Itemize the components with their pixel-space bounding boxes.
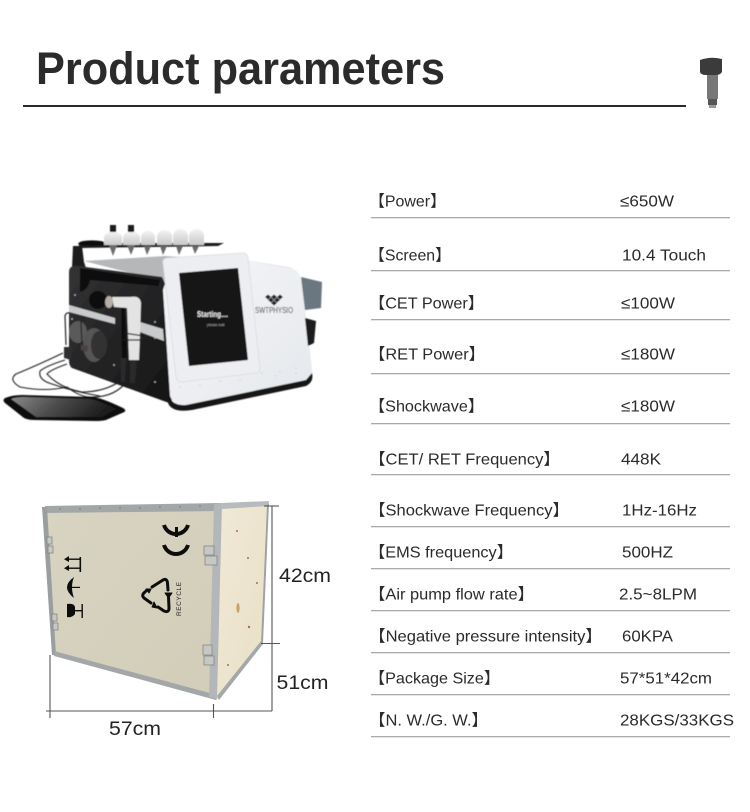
electrode heads [104,225,204,256]
connectors [64,347,72,360]
gauges [69,321,87,343]
row: CET power: ≤100W [621,296,676,312]
row: air pump [369,586,730,611]
machine illustration [4,225,322,421]
dimension lines [46,506,280,718]
grey bands [69,305,115,324]
recycle triangle [143,579,172,612]
handpiece [105,296,144,383]
row: frequency: 【CET/ RET Frequency】 [369,452,560,468]
recycle text: RECYCLE [176,581,183,616]
title underline [23,105,686,107]
parameter table [369,194,734,737]
rack plate [78,243,224,248]
top panel [84,256,292,282]
crate photo [42,501,269,700]
frame [42,501,269,700]
screen bezel [163,253,260,382]
row: RET power [369,346,730,374]
row: shockwave frequency: 【Shockwave Frequency】 [369,502,569,520]
row: screen [369,248,730,271]
crate side face [217,502,268,700]
row: negative pressure: 【Negative pressure intensity】 [369,628,602,646]
row: EMS: 500HZ [622,544,673,562]
row: power: ≤650W [620,194,675,210]
row: shockwave [369,398,730,424]
row: screen: 10.4 Touch [622,248,706,264]
hinges [47,537,217,665]
wood knots [227,530,258,666]
row: RET power: ≤180W [621,346,676,364]
row: package: 57*51*42cm [620,670,712,688]
speaker dots [180,368,296,388]
row: EMS [369,544,730,569]
dark body [69,266,172,404]
row: shockwave: ≤180W [621,398,676,416]
row: package [369,670,730,695]
brand text: SWTPHYSIO [255,305,293,315]
machine illustration: please wait [207,323,225,327]
row: weight [369,712,734,737]
row: power: 【Power】 [369,194,446,210]
cables [13,353,128,397]
dark recess [89,291,107,309]
handling icons [64,556,83,618]
row: EMS: 【EMS frequency】 [369,544,513,562]
row: CET power [369,296,730,320]
title: Product parameters [36,43,445,94]
row: power [369,194,730,218]
row: frequency: 448K [621,452,661,468]
screen [179,268,248,366]
foot pad [4,395,125,421]
row: CET power: 【CET Power】 [369,296,484,312]
screen text: Starting.... [197,310,228,319]
crate front face [45,504,220,700]
black base [168,373,312,411]
row: screen: 【Screen】 [369,248,451,264]
row: package: 【Package Size】 [369,670,500,688]
CE mark [164,525,188,554]
row: negative pressure [369,628,730,653]
logo [265,294,283,306]
row: negative pressure: 60KPA [622,628,673,646]
back pocket [301,277,322,310]
row: weight: 【N. W./G. W.】 [369,712,488,730]
row: RET power: 【RET Power】 [369,346,485,364]
row: air pump: 【Air pump flow rate】 [369,586,534,604]
row: shockwave frequency: 1Hz-16Hz [622,502,697,520]
row: frequency [369,452,730,475]
dimension label: width: 51cm [276,673,328,694]
row: weight: 28KGS/33KGS [620,712,734,730]
icon: handpiece [700,58,722,108]
row: air pump: 2.5~8LPM [619,586,697,604]
rivets [71,294,156,383]
rack support arm [72,246,86,268]
dimension label: length: 57cm [109,719,161,740]
white case [163,261,312,406]
dimension label: height: 42cm [279,566,331,587]
rivets [59,505,201,510]
row: shockwave: 【Shockwave】 [369,398,484,416]
row: shockwave frequency [369,502,730,527]
